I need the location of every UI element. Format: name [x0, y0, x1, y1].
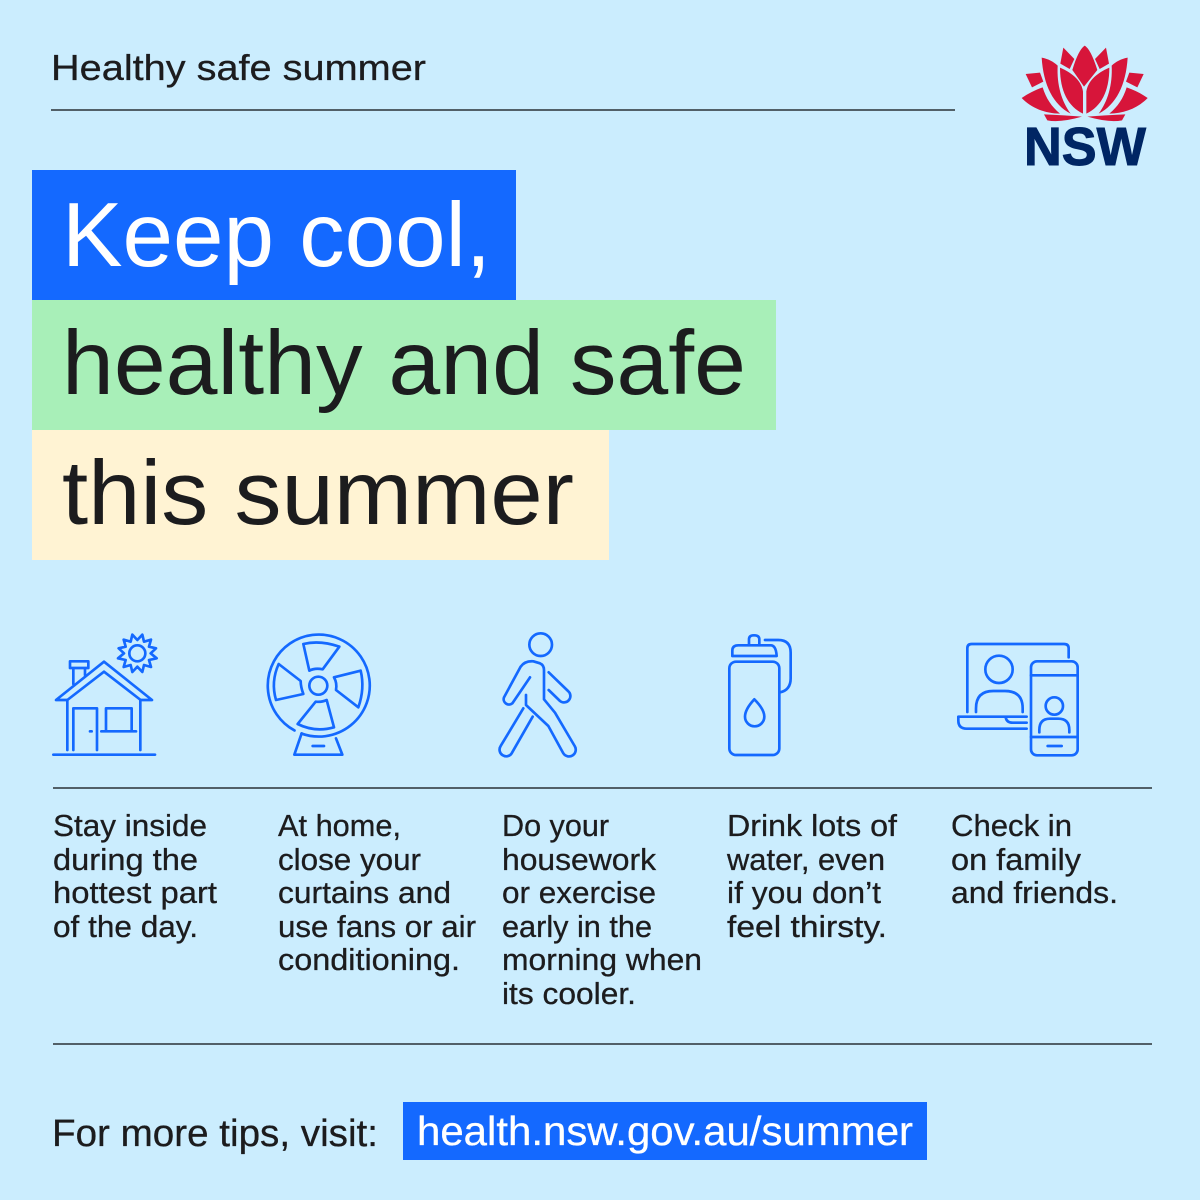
headline — [32, 170, 776, 560]
tip 4 text — [726, 808, 897, 944]
headline line 3: this summer: this summer — [62, 443, 574, 544]
tip 1 text: during the — [53, 842, 198, 877]
tip 2 text: conditioning. — [278, 942, 460, 977]
tip 4 text: water, even — [726, 842, 885, 877]
tip 1 text: of the day. — [53, 909, 198, 944]
tip 4 text: feel thirsty. — [727, 909, 887, 944]
tip 2 text: use fans or air — [278, 909, 476, 944]
tip 3 text: its cooler. — [502, 976, 636, 1011]
tip 3 text: early in the — [502, 909, 652, 944]
NSW logo — [1022, 46, 1148, 177]
tip 2 text: At home, — [278, 808, 401, 843]
icon: laptop and phone video call — [958, 644, 1078, 755]
tip 3 text: morning when — [502, 942, 702, 977]
footer link: health.nsw.gov.au/summer — [417, 1108, 913, 1154]
icon: fan — [268, 635, 370, 755]
tip 2 text: curtains and — [278, 875, 451, 910]
icon: walking person — [500, 633, 576, 756]
tip 4 text: Drink lots of — [727, 808, 897, 843]
tip 5 text: on family — [951, 842, 1082, 877]
tip 3 text: or exercise — [502, 875, 656, 910]
icon: house with sun — [53, 635, 157, 755]
tip 3 text: housework — [502, 842, 657, 877]
tip 5 text: and friends. — [951, 875, 1118, 910]
headline line 3: this summer — [32, 430, 609, 560]
tip 2 text — [278, 808, 476, 977]
tip 1 text — [53, 808, 217, 944]
tip 1 text: hottest part — [53, 875, 217, 910]
tip 3 text — [502, 808, 702, 1011]
header label: Healthy safe summer — [51, 47, 426, 88]
headline line 1: Keep cool: Keep cool, — [62, 185, 491, 286]
tip 2 text: close your — [278, 842, 421, 877]
headline line 1: Keep cool — [32, 170, 516, 300]
tip 4 text: if you don’t — [727, 875, 881, 910]
tip 1 text: Stay inside — [53, 808, 207, 843]
headline line 2: healthy and safe: healthy and safe — [62, 313, 746, 414]
tip 3 text: Do your — [502, 808, 609, 843]
tip 5 text: Check in — [951, 808, 1072, 843]
footer prompt: For more tips, visit: — [52, 1113, 378, 1155]
NSW logo: NSW — [1024, 117, 1146, 177]
headline line 2: healthy and safe — [32, 300, 776, 430]
icon: water bottle — [729, 635, 791, 755]
tip 5 text — [951, 808, 1118, 910]
